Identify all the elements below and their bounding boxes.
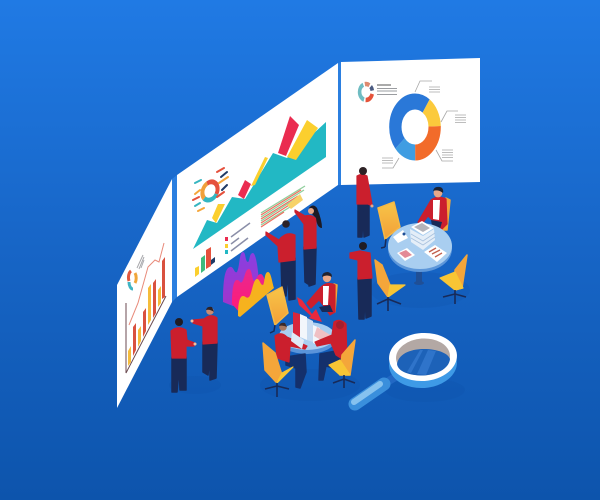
thin yellow bar (251, 157, 268, 186)
chair right (329, 340, 355, 388)
bar chart (128, 257, 165, 366)
legend lines (137, 255, 144, 269)
handle (354, 374, 400, 404)
axes (126, 296, 166, 373)
documents (393, 230, 447, 262)
bars and red arrow on table (293, 297, 332, 346)
area chart (193, 122, 326, 249)
yellow chair top (267, 287, 288, 333)
callout labels (382, 81, 466, 168)
line chart (129, 243, 164, 325)
seated man top (307, 272, 337, 315)
small yellow bar (212, 204, 225, 223)
panel: right wall chart (341, 58, 480, 185)
man pointing at chart (266, 220, 295, 300)
standing man in centre (350, 242, 372, 319)
yellow bar tall (287, 120, 318, 160)
floor shadows (169, 272, 470, 402)
small bar chart (195, 247, 215, 277)
left yellow chair (378, 202, 400, 248)
yellow layer (238, 272, 274, 317)
seated man left (275, 323, 307, 388)
mini donut with legend (193, 168, 228, 211)
table (388, 223, 452, 285)
panel: middle wall chart (177, 62, 341, 297)
mini donut (128, 271, 136, 289)
red bar tall (278, 116, 299, 156)
chair bottom left (375, 260, 405, 311)
two men talking (171, 307, 217, 392)
rim (387, 331, 459, 383)
lens glare (407, 350, 436, 375)
3D mountain chart (223, 252, 274, 317)
panel: left wall chart (117, 175, 177, 408)
seated man top right (418, 187, 450, 230)
icon: magnifying glass (354, 331, 459, 404)
mini donut (360, 84, 372, 100)
paper stack (410, 221, 435, 250)
pink layer (232, 269, 267, 313)
man right (190, 307, 217, 380)
woman pointing at chart (295, 206, 322, 286)
table (279, 322, 335, 354)
rim side (387, 338, 459, 390)
chair bottom right (440, 255, 467, 304)
purple layer (223, 252, 259, 306)
chair left (263, 343, 293, 397)
seated woman right (315, 320, 347, 380)
small red bar (238, 180, 251, 199)
legend lines (377, 85, 397, 94)
standing man by right panel (357, 167, 374, 237)
big donut chart (395, 102, 435, 152)
horizontal striped chart (261, 186, 305, 227)
right table group (350, 167, 467, 319)
legend (225, 223, 250, 254)
people at middle panel (266, 206, 322, 300)
lens (397, 349, 450, 376)
inside (395, 337, 451, 377)
left table group (263, 272, 355, 397)
man left (171, 318, 196, 392)
